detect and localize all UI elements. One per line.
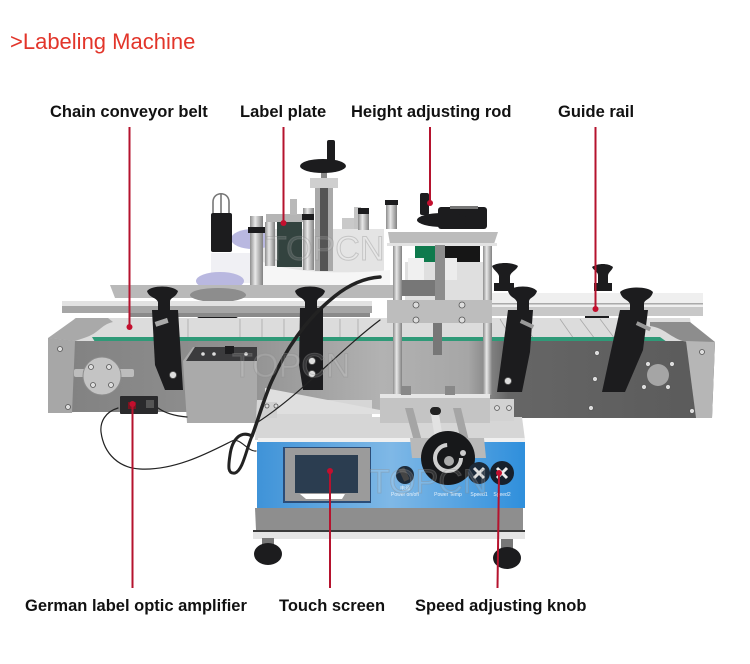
conveyor body (48, 338, 715, 418)
belt segment lines (168, 319, 615, 339)
label: German label optic amplifier: German label optic amplifier (25, 597, 247, 615)
label: Chain conveyor belt (50, 103, 208, 330)
front guide rails (62, 293, 703, 317)
base table top (255, 388, 525, 442)
control box (183, 346, 257, 423)
green belt edge (92, 337, 667, 342)
hand wheel: Power Temp (434, 492, 462, 498)
left bearing (74, 357, 134, 395)
clamps (147, 286, 653, 392)
label: Touch screen: Touch screen (279, 597, 385, 615)
label: Label plate (240, 103, 326, 226)
right corner plate (490, 399, 514, 421)
power knob: Power on/off (391, 492, 420, 498)
right labeling head (400, 193, 487, 302)
label: Guide rail (558, 103, 634, 312)
label: German label optic amplifier (25, 401, 247, 615)
left end cap (48, 318, 113, 413)
label: Height adjusting rod (351, 103, 511, 206)
vertical frame (380, 232, 498, 423)
power knob (391, 466, 420, 498)
conveyor belt top (60, 318, 693, 341)
title: >Labeling Machine (10, 29, 195, 54)
label: Label plate: Label plate (240, 103, 326, 121)
back right clamps (492, 263, 613, 322)
label: Chain conveyor belt: Chain conveyor belt (50, 103, 208, 121)
speed knobs: Speed2 (493, 492, 511, 498)
label: Speed adjusting knob (415, 470, 586, 615)
lower steel strip (253, 508, 525, 539)
speed knobs: Speed1 (470, 492, 488, 498)
watermark: TOPCN (232, 347, 350, 385)
machine (48, 140, 715, 569)
label: Guide rail: Guide rail (558, 103, 634, 121)
power knob: 电源 (400, 485, 410, 492)
blue control panel (257, 442, 525, 508)
watermark: TOPCN (369, 463, 487, 501)
cables (101, 277, 380, 473)
label: Speed adjusting knob: Speed adjusting knob (415, 597, 586, 615)
right end cap (650, 322, 715, 418)
hand wheel (421, 431, 475, 498)
rollers (405, 407, 486, 458)
label: Touch screen (279, 468, 385, 615)
black disc (190, 288, 246, 302)
speed knobs (468, 461, 514, 498)
optic amplifier (120, 396, 158, 414)
back labeling unit (196, 140, 398, 290)
touch screen (283, 447, 371, 503)
adjustable feet (254, 538, 521, 569)
watermark (232, 230, 487, 501)
watermark: TOPCN (266, 230, 384, 268)
right bearing (588, 350, 674, 410)
label: Height adjusting rod: Height adjusting rod (351, 103, 511, 121)
back rail (110, 285, 400, 298)
